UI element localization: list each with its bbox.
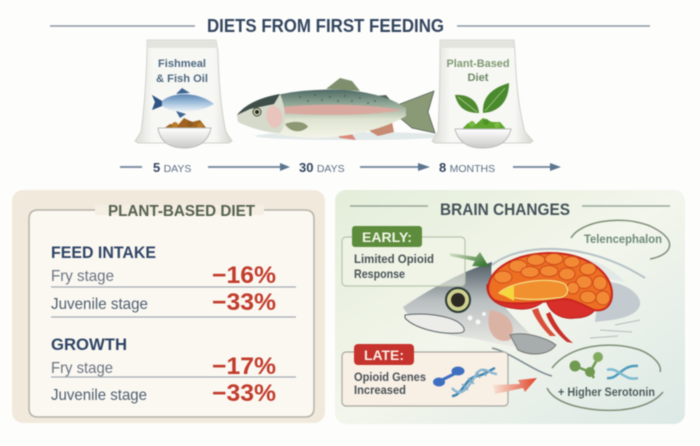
- panel: brain changes: [335, 190, 685, 424]
- callout: early: [342, 226, 465, 286]
- section: growth: −17%: [212, 353, 276, 380]
- illustration: fish head with brain: [403, 249, 645, 376]
- bag label: plant-based diet: Plant-Based: [446, 58, 510, 70]
- lateral stripe: [282, 105, 402, 115]
- callout: telencephalon: [571, 220, 670, 259]
- section: growth: −33%: [212, 380, 276, 407]
- callout: late: Opioid Genes: [354, 370, 426, 384]
- section: growth: Fry stage: [51, 360, 113, 377]
- callout: late: Increased: [354, 383, 406, 397]
- section: feed intake: −16%: [212, 262, 276, 289]
- icon: leaves: [455, 83, 509, 113]
- icon: plant-based diet bag: [432, 40, 533, 148]
- icon: green molecule: [570, 352, 603, 378]
- section: feed intake: −33%: [212, 289, 276, 316]
- upper lobes: [488, 253, 612, 310]
- timeline label: 8 months: 8 MONTHS: [439, 160, 495, 175]
- arrow: early to brain: [450, 252, 489, 267]
- icon: plant-based diet bag: Diet: [468, 72, 489, 84]
- lower lobes: [545, 296, 598, 318]
- badge: late: LATE:: [364, 347, 404, 363]
- callout: higher serotonin: [547, 345, 663, 410]
- rear body: [595, 282, 640, 322]
- icon: brown feed bowl: [158, 118, 211, 148]
- callout: telencephalon: Telencephalon: [584, 234, 662, 246]
- timeline label: 5 days: 5 DAYS: [153, 160, 191, 175]
- section: growth: [51, 335, 296, 407]
- section: feed intake: [51, 243, 296, 317]
- callout: late: [342, 344, 508, 406]
- heading: plant-based diet: PLANT-BASED DIET: [108, 203, 255, 220]
- section: growth: Juvenile stage: [51, 387, 147, 404]
- callout: higher serotonin: + Higher Serotonin: [558, 387, 655, 399]
- brain stems: [532, 308, 556, 336]
- icon: dna and molecule: [433, 366, 497, 396]
- badge: late: [354, 344, 414, 365]
- arrow: late to serotonin: [493, 378, 537, 394]
- bag label: fishmeal and fish oil: Fishmeal: [158, 58, 206, 70]
- icon: green feed bowl: [455, 118, 511, 148]
- icon: trout: [237, 78, 445, 140]
- callout: early: Limited Opioid: [354, 252, 434, 266]
- heading: brain changes: BRAIN CHANGES: [440, 200, 570, 219]
- icon: blue dna: [607, 366, 638, 379]
- timeline label: 30 days: 30 DAYS: [299, 160, 345, 175]
- section: feed intake: Juvenile stage: [51, 296, 148, 313]
- icon: brain: [487, 253, 612, 343]
- title: diets from first feeding: DIETS FROM FIRST FEEDING: [207, 16, 444, 36]
- section: feed intake: FEED INTAKE: [51, 243, 156, 262]
- section: feed intake: Fry stage: [51, 268, 114, 285]
- head: [403, 262, 540, 347]
- panel: plant-based diet: [12, 190, 325, 423]
- icon: blue fish: [152, 88, 214, 118]
- callout: early: Response: [354, 267, 405, 281]
- icon: fishmeal and fish oil bag: [135, 40, 232, 148]
- badge: early: EARLY:: [362, 229, 412, 245]
- section: growth: GROWTH: [51, 335, 127, 354]
- icon: fishmeal and fish oil bag: & Fish Oil: [156, 73, 208, 85]
- icon: eye: [446, 288, 470, 312]
- timeline: [120, 160, 561, 175]
